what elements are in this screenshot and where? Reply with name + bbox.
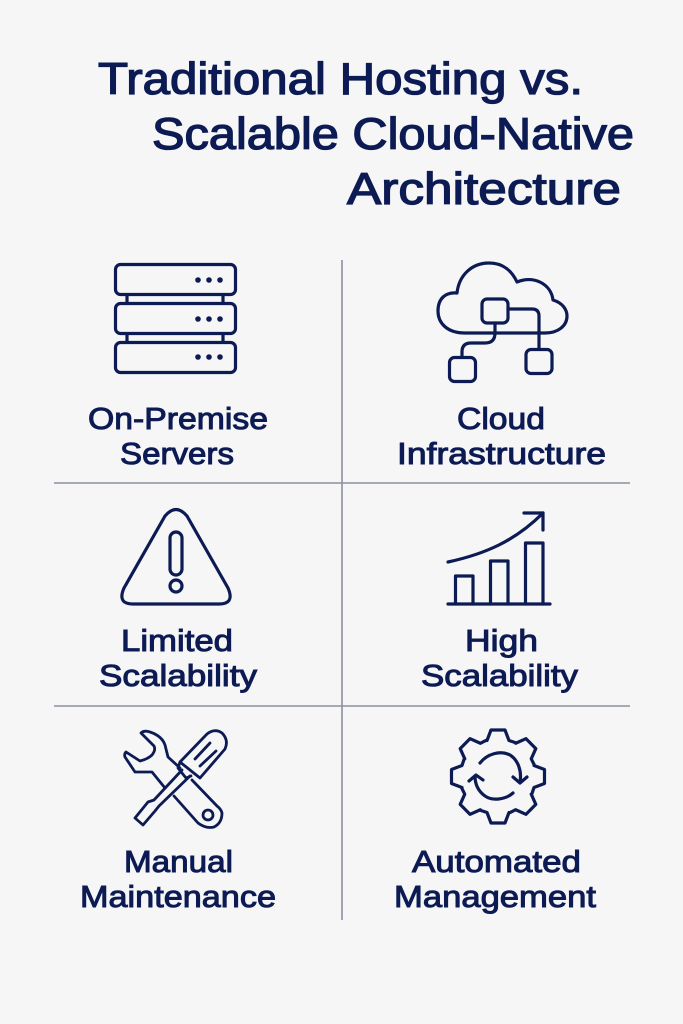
icon: warning triangle [122, 510, 230, 604]
icon: rising bar chart [448, 513, 550, 604]
icon: server rack [116, 264, 236, 372]
label: manual maintenance [80, 844, 276, 914]
label: high scalability: High [465, 623, 538, 658]
label: high scalability: Scalability [421, 658, 579, 693]
label: on-premise servers: On-Premise [88, 401, 268, 436]
label: manual maintenance: Manual [124, 844, 233, 879]
panel: cloud infrastructure [397, 263, 606, 471]
label: high scalability [421, 623, 579, 693]
label: on-premise servers [88, 401, 268, 471]
label: limited scalability: Scalability [99, 658, 258, 693]
panel: manual maintenance [80, 731, 276, 914]
panel: limited scalability [99, 510, 258, 693]
label: on-premise servers: Servers [120, 436, 234, 471]
label: cloud infrastructure: Cloud [457, 401, 545, 436]
panel: on-premise servers [88, 264, 268, 471]
label: limited scalability [99, 623, 258, 693]
label: manual maintenance: Maintenance [80, 879, 276, 914]
icon: crossed wrench and screwdriver [125, 731, 226, 828]
label: cloud infrastructure [397, 401, 606, 471]
title: Traditional Hosting vs. [98, 55, 583, 104]
panel: high scalability [421, 513, 579, 693]
label: limited scalability: Limited [121, 623, 233, 658]
panel: automated management [394, 730, 596, 914]
label: cloud infrastructure: Infrastructure [397, 436, 606, 471]
label: automated management: Automated [412, 844, 581, 879]
title: Scalable Cloud-Native [152, 110, 634, 159]
label: automated management: Management [394, 879, 596, 914]
title: Architecture [347, 165, 621, 214]
title [98, 55, 634, 214]
icon: gear with cycle arrows [452, 730, 544, 823]
icon: cloud with connected nodes [438, 263, 567, 382]
label: automated management [394, 844, 596, 914]
